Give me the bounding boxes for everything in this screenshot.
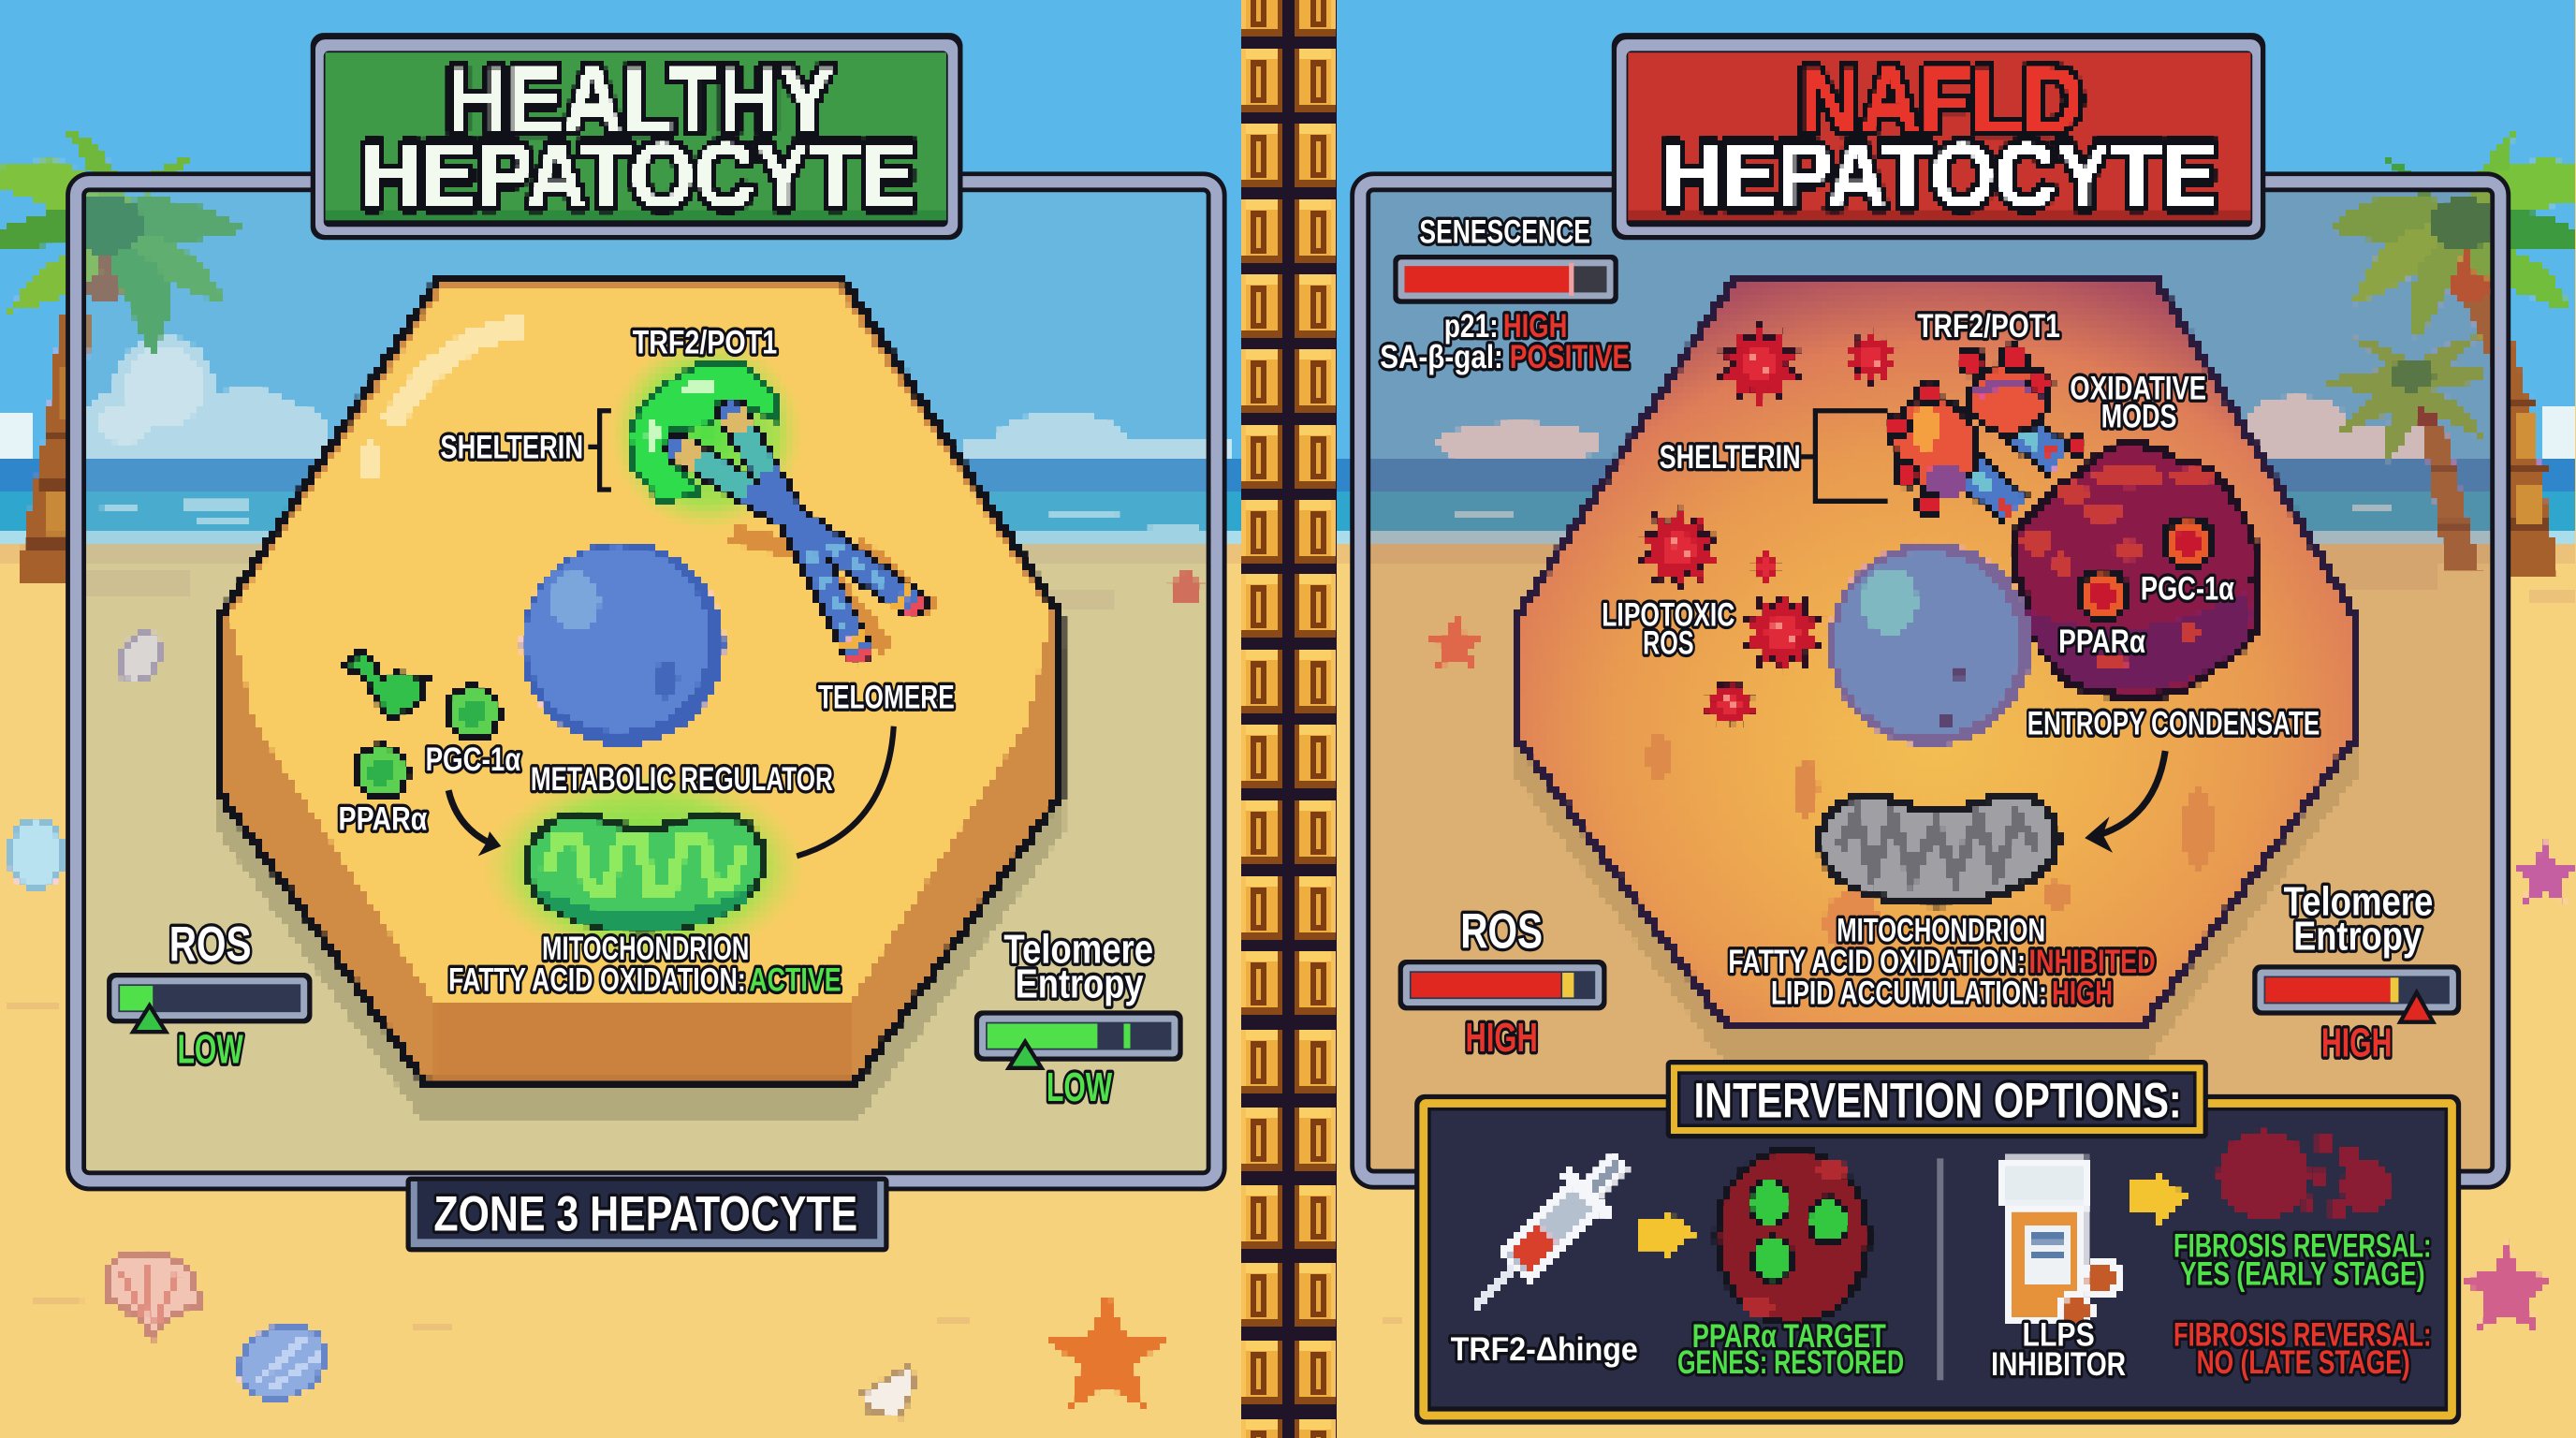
gauge: telomere entropy high (2252, 879, 2461, 1066)
labels: NAFLD cell (1602, 308, 2320, 1011)
gauge: ROS high: ROS (1460, 904, 1543, 960)
gauge: telomere entropy high: Entropy (2293, 913, 2422, 959)
labels: healthy cell: TELOMERE (818, 679, 955, 715)
gauge: senescence: SA-β-gal: (1380, 339, 1503, 375)
intervention box frame (1414, 1094, 2461, 1425)
icon: damaged chromosome (1876, 345, 2085, 516)
title: NAFLD hepatocyte (1612, 33, 2265, 240)
panel frame: NAFLD (1360, 182, 2500, 1180)
labels: NAFLD cell: HIGH (2052, 975, 2113, 1011)
panel frame: healthy (76, 182, 1217, 1181)
gauge: ROS low: ROS (169, 917, 252, 973)
gauge: telomere entropy high: HIGH (2321, 1020, 2392, 1066)
arrow: condensate to mitochondrion (2085, 751, 2165, 853)
right panel tint (1367, 191, 2500, 1178)
intervention heading (1666, 1060, 2208, 1138)
title: healthy hepatocyte: HEALTHY (446, 48, 835, 151)
arrow: regulators to mitochondrion (448, 790, 501, 856)
arrow: telomere to mitochondrion (797, 726, 894, 856)
gauge: senescence (1380, 214, 1630, 375)
labels: NAFLD cell: MODS (2101, 398, 2177, 434)
intervention labels: LLPS (2023, 1316, 2095, 1353)
gauge: telomere entropy low (974, 926, 1183, 1110)
icon: ROS particles (1636, 320, 1898, 731)
labels: NAFLD cell: MITOCHONDRION (1837, 913, 2045, 949)
panel: NAFLD hepatocyte (1360, 33, 2500, 1180)
intervention labels: YES (EARLY STAGE) (2180, 1255, 2425, 1292)
labels: healthy cell: ACTIVE (749, 961, 842, 998)
intervention labels: NO (LATE STAGE) (2197, 1344, 2410, 1381)
panel: intervention options (1414, 1060, 2461, 1425)
brick divider column (1241, 0, 1337, 1438)
panel: healthy hepatocyte (76, 33, 1217, 1252)
icon: green proteins (345, 651, 500, 799)
intervention heading: INTERVENTION OPTIONS: (1694, 1073, 2182, 1128)
icon: shelterin ring (607, 335, 805, 533)
arrow: bottle to fibrosis (2130, 1170, 2188, 1225)
gauge: telomere entropy low: Entropy (1016, 961, 1144, 1006)
icon: chromosome (681, 414, 933, 661)
healthy cell artwork (217, 276, 1064, 1121)
intervention labels (1451, 1228, 2432, 1383)
gauge: telomere entropy high: Telomere (2284, 879, 2433, 925)
labels: NAFLD cell: SHELTERIN (1660, 439, 1801, 476)
labels: healthy cell: TRF2/POT1 (633, 324, 777, 360)
labels: NAFLD cell: INHIBITED (2029, 944, 2156, 980)
gauge: ROS high: HIGH (1466, 1015, 1538, 1061)
icon: syringe (1450, 1138, 1643, 1331)
intervention labels: INHIBITOR (1991, 1346, 2126, 1383)
labels: NAFLD cell: PGC-1α (2141, 571, 2234, 608)
palm tree: left (0, 128, 250, 583)
labels: healthy cell (339, 324, 955, 998)
labels: NAFLD cell: ROS (1643, 625, 1694, 662)
intervention labels: PPARα TARGET (1692, 1318, 1886, 1355)
arrow: shelterin bracket NAFLD (1801, 411, 1888, 501)
gauge: telomere entropy low: LOW (1046, 1064, 1113, 1110)
title: healthy hepatocyte (311, 33, 962, 240)
palm tree: right small (2323, 337, 2491, 574)
gauge: senescence: p21: (1444, 308, 1499, 345)
gauge: telomere entropy low: Telomere (1003, 926, 1153, 972)
labels: NAFLD cell: ENTROPY CONDENSATE (2027, 706, 2320, 742)
title: NAFLD hepatocyte: NAFLD (1799, 48, 2083, 151)
labels: NAFLD cell: LIPOTOXIC (1602, 597, 1734, 634)
gauge: senescence: SENESCENCE (1419, 214, 1590, 251)
left panel tint (85, 191, 1216, 1178)
icon: dissolving fibrosis (2217, 1131, 2391, 1219)
labels: healthy cell: PGC-1α (426, 741, 521, 778)
gauge: senescence: POSITIVE (1510, 339, 1630, 375)
icon: damaged nucleus (1828, 542, 2032, 746)
icon: pill bottle (2001, 1160, 2119, 1328)
gauge: ROS high (1398, 904, 1606, 1061)
labels: healthy cell: FATTY ACID OXIDATION: (448, 961, 746, 998)
icon: mitochondrion (479, 769, 809, 966)
gauge: ROS low (107, 917, 312, 1073)
badge: zone 3 hepatocyte (406, 1177, 889, 1252)
intervention labels: GENES: RESTORED (1677, 1344, 1904, 1381)
icon: nucleus (520, 542, 724, 746)
title: NAFLD hepatocyte: HEPATOCYTE (1661, 124, 2217, 227)
beach decorations: shells and starfish (10, 564, 2576, 1416)
gauge: senescence: HIGH (1503, 308, 1567, 345)
arrow: syringe to target (1640, 1210, 1695, 1258)
icon: fibrotic condensate (2012, 442, 2259, 697)
icon: inactive mitochondrion (1820, 795, 2057, 903)
intervention icons (1450, 1131, 2391, 1331)
labels: NAFLD cell: TRF2/POT1 (1917, 308, 2060, 345)
arrow: shelterin bracket (588, 411, 611, 490)
intervention labels: TRF2-Δhinge (1451, 1331, 1638, 1368)
labels: NAFLD cell: PPARα (2058, 624, 2145, 660)
badge: zone 3 hepatocyte: ZONE 3 HEPATOCYTE (433, 1187, 857, 1242)
title: healthy hepatocyte: HEPATOCYTE (361, 124, 916, 227)
labels: healthy cell: METABOLIC REGULATOR (531, 761, 833, 798)
gauge: ROS low: LOW (178, 1027, 243, 1073)
intervention labels: FIBROSIS REVERSAL: (2174, 1316, 2432, 1353)
labels: NAFLD cell: LIPID ACCUMULATION: (1771, 975, 2047, 1011)
intervention labels: FIBROSIS REVERSAL: (2174, 1228, 2432, 1265)
palm tree: right large (2328, 128, 2576, 579)
NAFLD cell artwork (1513, 276, 2359, 1062)
labels: healthy cell: SHELTERIN (440, 430, 583, 466)
icon: restored fibrotic cell (1717, 1151, 1868, 1325)
labels: NAFLD cell: FATTY ACID OXIDATION: (1728, 944, 2026, 980)
labels: healthy cell: PPARα (339, 800, 428, 837)
labels: healthy cell: MITOCHONDRION (542, 931, 749, 967)
labels: NAFLD cell: OXIDATIVE (2070, 370, 2206, 406)
